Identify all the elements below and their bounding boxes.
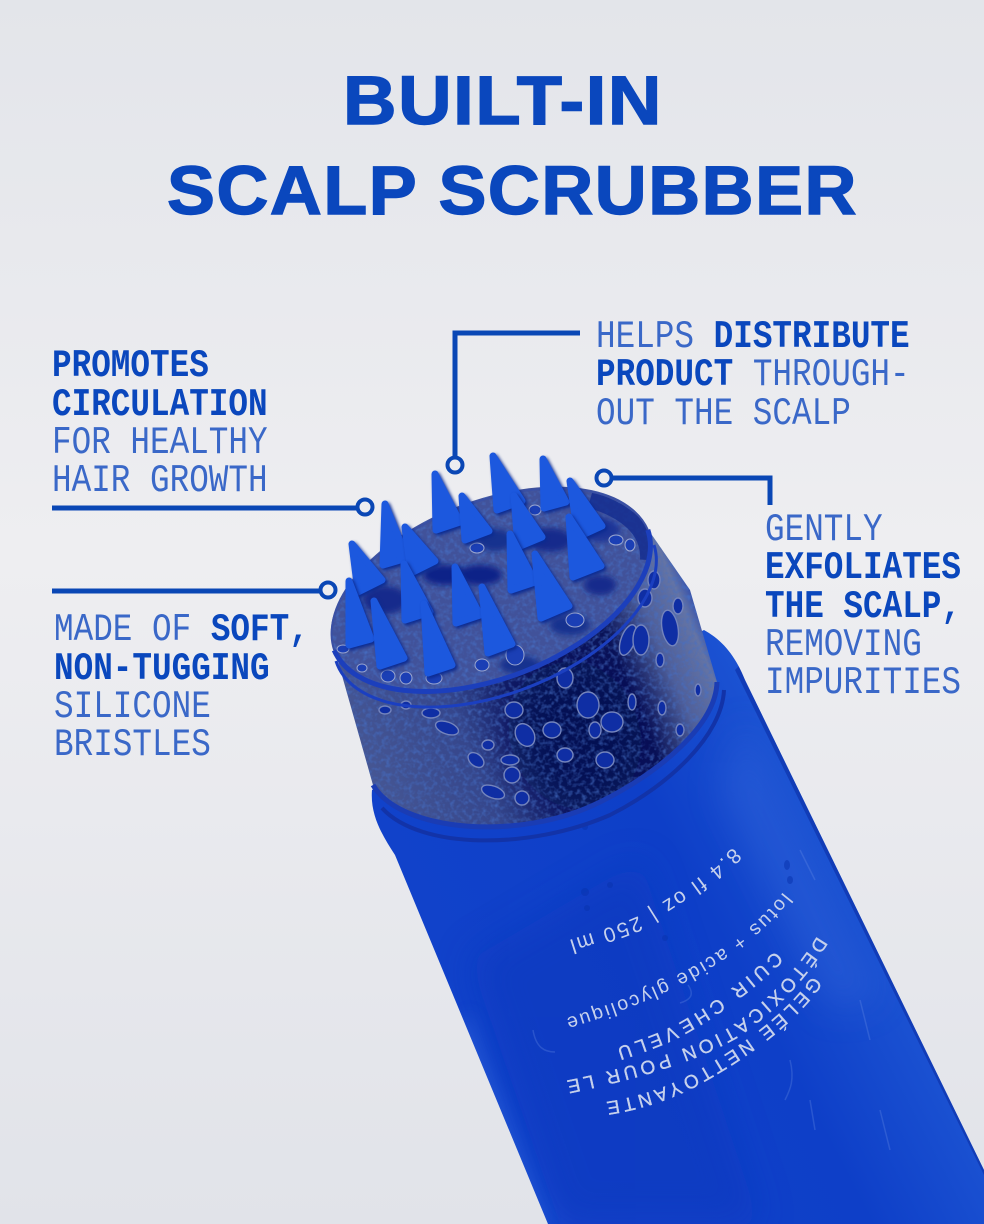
title	[167, 62, 858, 229]
callout: distribute product: PRODUCT THROUGH-	[596, 352, 910, 397]
title: BUILT-IN	[343, 62, 663, 139]
callout: exfoliates: GENTLY	[765, 507, 883, 552]
callout: soft bristles: BRISTLES	[54, 722, 211, 767]
bottle label text: 8.4 fl oz | 250 ml	[570, 849, 741, 954]
title: SCALP SCRUBBER	[167, 152, 858, 229]
product: bottle with scrubber cap	[330, 452, 984, 1224]
bottle label text: CUIR CHEVELU	[618, 954, 782, 1060]
callout: exfoliates: REMOVING	[765, 622, 922, 667]
callout: exfoliates	[596, 470, 961, 705]
rim	[334, 530, 650, 692]
callout: promotes circulation: PROMOTES	[52, 343, 209, 388]
bottle body	[372, 630, 984, 1224]
scrubber cap wall	[338, 530, 726, 842]
scrubber top face	[330, 486, 658, 709]
callout: exfoliates: IMPURITIES	[765, 660, 961, 705]
callout: promotes circulation: CIRCULATION	[52, 382, 268, 427]
callout: soft bristles: NON-TUGGING	[54, 646, 270, 691]
callout: exfoliates: EXFOLIATES	[765, 545, 961, 590]
callout: soft bristles: SILICONE	[54, 684, 211, 729]
bottle label text: lotus + acide glycolique	[568, 893, 794, 1027]
callout: promotes circulation: HAIR GROWTH	[52, 458, 268, 503]
cap base ring	[373, 682, 717, 827]
callout: exfoliates: THE SCALP,	[765, 584, 961, 629]
silicone bristles	[349, 456, 602, 673]
callout: distribute product: HELPS DISTRIBUTE	[596, 314, 910, 359]
callout: promotes circulation: FOR HEALTHY	[52, 420, 268, 465]
water drops on wall	[379, 571, 701, 805]
bottle label text: GELÉE NETTOYANTE	[606, 978, 820, 1115]
water drops on top face	[337, 497, 635, 684]
callout: soft bristles: MADE OF SOFT,	[54, 607, 309, 652]
callout: soft bristles	[52, 582, 336, 767]
callout: distribute product: OUT THE SCALP	[596, 391, 851, 436]
callout: distribute product	[448, 314, 910, 472]
bottle shading and water marks	[455, 660, 984, 1224]
callout: promotes circulation	[52, 343, 372, 514]
bottle label text	[567, 849, 828, 1115]
bottle label text: DÉTOXICATION POUR LE	[567, 937, 828, 1094]
